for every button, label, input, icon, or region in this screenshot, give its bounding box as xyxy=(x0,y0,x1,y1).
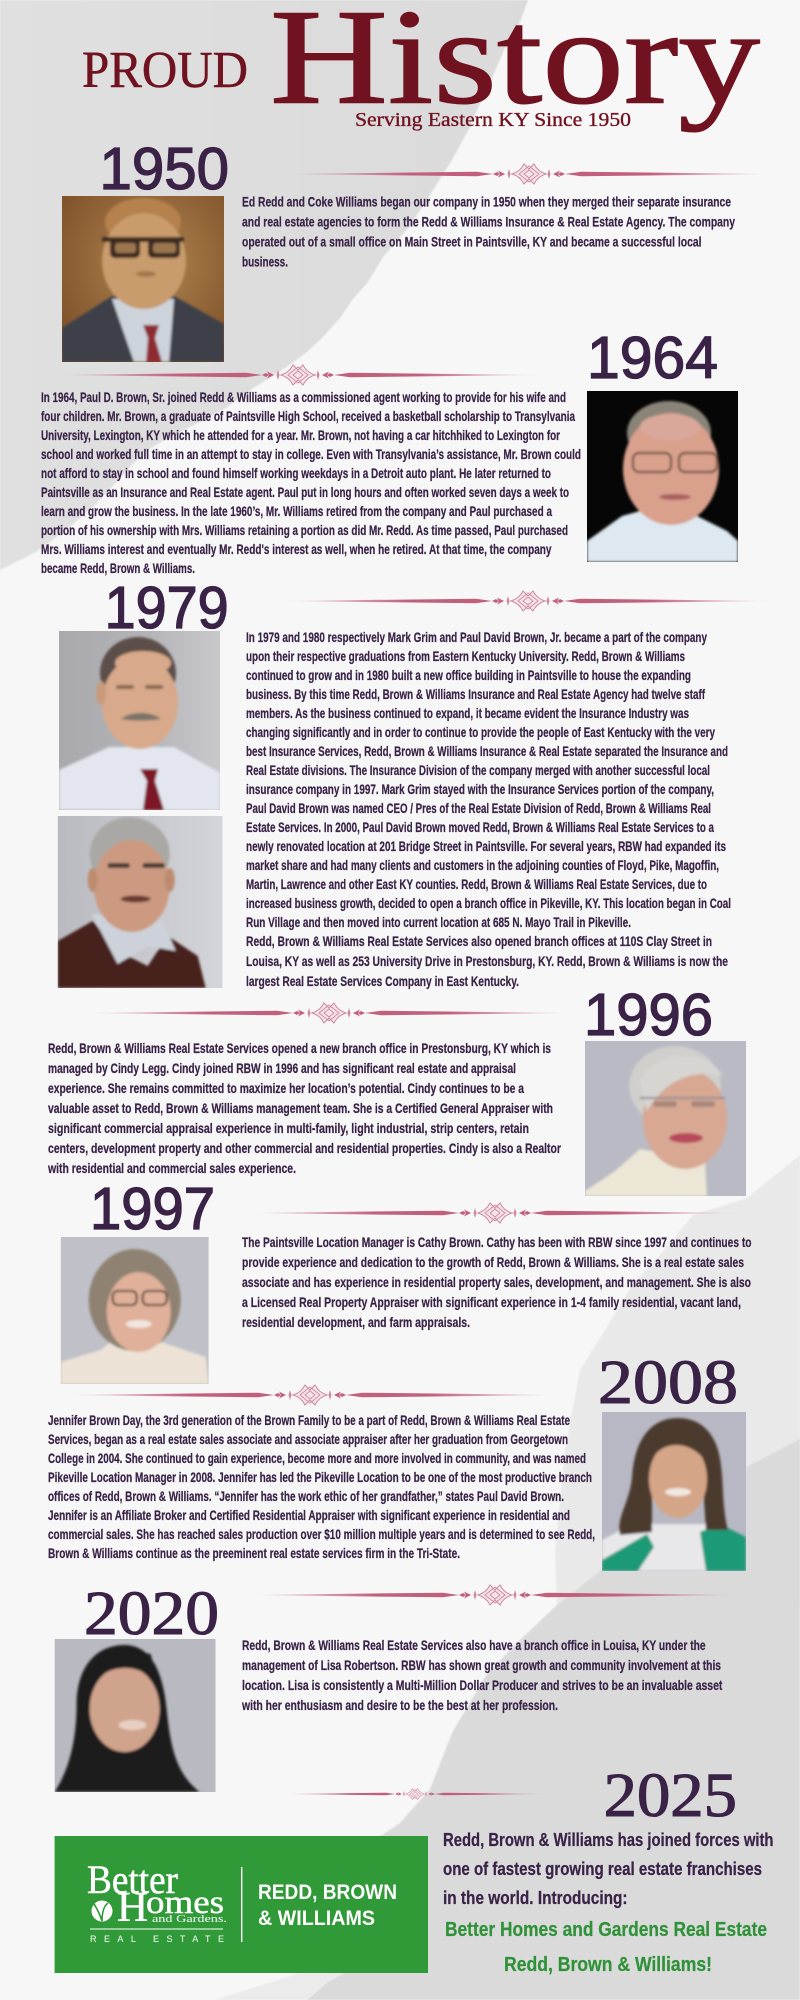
logo wordmark: and Gardens. xyxy=(152,1913,227,1925)
photo: Mark Grim portrait xyxy=(59,631,220,810)
year: 1996: 1996 xyxy=(584,982,713,1048)
logo wordmark: H xyxy=(117,1885,148,1931)
section: 2008 xyxy=(48,1349,746,1571)
body text: offices of Redd, Brown & Williams. “Jennifer has the work ethic of her grandfather,” states Paul David Brown. xyxy=(48,1489,564,1504)
divider ornament xyxy=(279,1788,551,1800)
body text: Redd, Brown & Williams Real Estate Services opened a new branch office in Prestonsburg, KY which is xyxy=(48,1041,551,1056)
body text: Paintsville as an Insurance and Real Estate agent. Paul put in long hours and often worked seven days a week to xyxy=(41,485,569,500)
body text: centers, development property and other commercial and residential properties. Cindy is also a Realtor xyxy=(48,1141,562,1156)
section: 1979 xyxy=(58,575,775,989)
section: 1997 xyxy=(61,1176,751,1384)
body text xyxy=(246,630,731,989)
body text: Run Village and then moved into current location at 685 N. Mayo Trail in Pikeville. xyxy=(246,915,631,930)
green brand callout xyxy=(445,1918,767,1976)
body text xyxy=(241,1638,723,1713)
year: 1997: 1997 xyxy=(90,1176,215,1242)
body text: school and worked full time in an attempt to stay in college. Even with Transylvania’s assistance, Mr. Brown could xyxy=(41,447,581,462)
section: 2020 xyxy=(55,1580,742,1792)
photo: Ed Redd portrait xyxy=(62,196,224,362)
body text: experience. She remains committed to maximize her location’s potential. Cindy continues to be a xyxy=(48,1081,524,1096)
body text xyxy=(48,1413,595,1561)
body text: In 1964, Paul D. Brown, Sr. joined Redd & Williams as a commissioned agent working to provide for his wife and xyxy=(41,390,566,405)
divider ornament xyxy=(63,1385,557,1405)
body text: business. xyxy=(242,254,288,270)
year: 2025: 2025 xyxy=(604,1762,737,1830)
logo panel: Better Homes and Gardens Real Estate, Redd, Brown & Williams xyxy=(55,1836,428,1973)
divider ornament xyxy=(248,1203,742,1223)
logo wordmark: Better xyxy=(87,1857,178,1902)
year: 1964: 1964 xyxy=(587,325,718,391)
photo: Cathy Brown portrait xyxy=(61,1237,209,1384)
green brand callout: Redd, Brown & Williams! xyxy=(504,1953,712,1976)
body text: University, Lexington, KY which he attended for a year. Mr. Brown, not having a car hitchhiked to Lexington for xyxy=(41,428,560,443)
photo: Lisa Robertson portrait xyxy=(55,1639,216,1792)
subtitle: Serving Eastern KY Since 1950 xyxy=(355,109,631,131)
title xyxy=(82,0,760,132)
body text: residential development, and farm appraisals. xyxy=(242,1315,470,1330)
section: 1996 xyxy=(47,982,746,1196)
body text xyxy=(41,390,581,576)
body text: portion of his ownership with Mrs. Williams retaining a portion as did Mr. Redd. As time passed, Paul purchased xyxy=(41,523,568,538)
section: 1950 xyxy=(62,136,776,362)
logo panel: Better Homes and Gardens Real Estate, Redd, Brown & Williams: & WILLIAMS xyxy=(258,1907,375,1930)
year: 2008: 2008 xyxy=(598,1349,738,1417)
section: 1964 xyxy=(41,325,738,576)
body text: Jennifer Brown Day, the 3rd generation of the Brown Family to be a part of Redd, Brown & Williams Real Estate xyxy=(48,1413,570,1428)
body text: Services, began as a real estate sales associate and associate appraiser after her graduation from Georgetown xyxy=(48,1432,568,1447)
photo: Paul David Brown Jr. portrait xyxy=(58,816,223,988)
logo company name: REDD, BROWN xyxy=(258,1881,397,1904)
photo: Cindy Legg portrait xyxy=(585,1041,746,1196)
title word: PROUD: PROUD xyxy=(82,42,248,99)
body text: with residential and commercial sales experience. xyxy=(47,1161,296,1176)
photo: Jennifer Brown Day portrait xyxy=(602,1412,746,1571)
body text: with her enthusiasm and desire to be the best at her profession. xyxy=(241,1698,558,1713)
announcement text xyxy=(443,1829,774,1908)
body text: significant commercial appraisal experience in multi-family, light industrial, strip centers, retain xyxy=(48,1121,529,1136)
body text: College in 2004. She continued to gain experience, become more and more involved in community, and was named xyxy=(48,1451,586,1466)
year: 2020: 2020 xyxy=(84,1580,219,1648)
section: 2025 xyxy=(55,1762,774,1976)
logo tagline: REAL ESTATE xyxy=(90,1934,224,1944)
body text: largest Real Estate Services Company in East Kentucky. xyxy=(246,974,519,989)
logo wordmark xyxy=(87,1857,227,1931)
body text: not afford to stay in school and found himself working weekdays in a Detroit auto plant. He later returned to xyxy=(41,466,551,481)
body text: commercial sales. She has reached sales production over $10 million multiple years and is determined to see Redd, xyxy=(48,1527,595,1542)
divider ornament xyxy=(248,1585,742,1605)
body text: valuable asset to Redd, Brown & Williams management team. She is a Certified General Appraiser with xyxy=(48,1101,553,1116)
body text xyxy=(47,1041,562,1176)
icon: leaf circle xyxy=(92,1900,112,1922)
divider ornament xyxy=(281,591,775,611)
body text: Pikeville Location Manager in 2008. Jennifer has led the Pikeville Location to be one of the most productive branch xyxy=(48,1470,592,1485)
announcement text: in the world. Introducing: xyxy=(443,1887,628,1908)
photo: Paul D. Brown Sr. portrait xyxy=(587,391,738,562)
year: 1979: 1979 xyxy=(105,575,229,641)
body text: Jennifer is an Affiliate Broker and Certified Residential Appraiser with significant experience in residential and xyxy=(48,1508,570,1523)
body text: learn and grow the business. In the late 1960’s, Mr. Williams retired from the company and Paul purchased a xyxy=(41,504,552,519)
divider ornament xyxy=(282,164,776,184)
divider ornament xyxy=(82,1003,576,1023)
body text xyxy=(242,194,735,270)
year: 1950: 1950 xyxy=(100,136,229,202)
logo wordmark: omes xyxy=(146,1885,224,1921)
body text: Mrs. Williams interest and eventually Mr. Redd's interest as well, when he retired. At that time, the company xyxy=(41,542,552,557)
body text: became Redd, Brown & Williams. xyxy=(41,561,195,576)
body text: managed by Cindy Legg. Cindy joined RBW in 1996 and has significant real estate and appraisal xyxy=(48,1061,516,1076)
divider ornament xyxy=(51,365,545,385)
body text: Brown & Williams continue as the preeminent real estate services firm in the Tri-State. xyxy=(48,1546,460,1561)
body text xyxy=(242,1235,752,1330)
body text: four children. Mr. Brown, a graduate of Paintsville High School, received a basketball scholarship to Transylvania xyxy=(41,409,575,424)
